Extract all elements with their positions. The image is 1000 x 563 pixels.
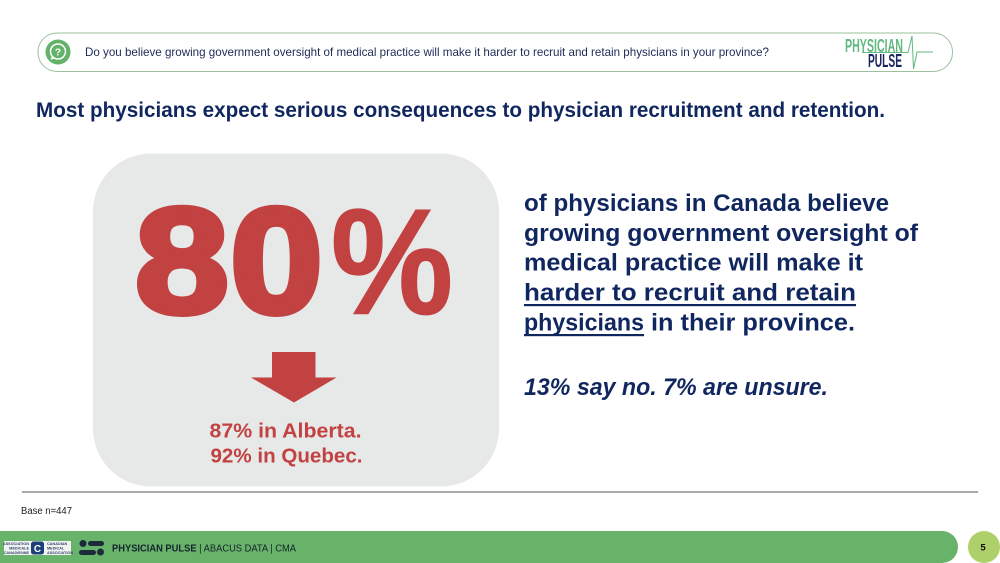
regional figures: 87% in Alberta. xyxy=(210,420,362,442)
arrow xyxy=(251,352,336,402)
logo: CMA: MÉDICALE xyxy=(9,546,29,550)
question banner xyxy=(38,33,952,72)
footer text: PHYSICIAN PULSE | ABACUS DATA | CMA xyxy=(112,544,296,554)
main statement: in their province. xyxy=(651,310,855,336)
main statement: medical practice will make it xyxy=(524,250,863,276)
logo: CMA: MEDICAL xyxy=(47,546,65,550)
panel: 80% statistic xyxy=(93,154,499,486)
secondary statement: 13% say no. 7% are unsure. xyxy=(524,374,828,401)
logo: Abacus Data xyxy=(79,540,104,556)
big number xyxy=(135,176,453,346)
question text: Do you believe growing government oversight of medical practice will make it harder to recruit and retain physicians in your province? xyxy=(85,45,769,59)
main statement: growing government oversight of xyxy=(524,220,919,247)
big number: 8 xyxy=(135,176,229,344)
logo: CMA xyxy=(3,541,73,555)
logo: Physician Pulse: PULSE xyxy=(868,51,902,71)
icon: question bubble xyxy=(46,40,70,64)
big number: 0 xyxy=(230,176,323,344)
main statement: harder to recruit and retain xyxy=(524,280,856,306)
logo: Physician Pulse: PHYSICIAN xyxy=(845,36,903,56)
page number xyxy=(968,531,1000,563)
icon: question bubble: ? xyxy=(55,46,61,58)
base note: Base n=447 xyxy=(21,506,72,517)
divider xyxy=(22,492,978,493)
big number: % xyxy=(331,178,453,346)
main statement: physicians xyxy=(524,310,644,336)
logo: Physician Pulse xyxy=(845,36,933,71)
footer bar xyxy=(0,531,958,563)
heading: Most physicians expect serious consequences to physician recruitment and retention. xyxy=(36,99,885,122)
logo: CMA: ASSOCIATION xyxy=(47,551,73,555)
logo: CMA: CANADIAN xyxy=(47,542,68,546)
page number: 5 xyxy=(980,542,986,554)
logo: CMA: C xyxy=(34,544,41,555)
regional figures: 92% in Quebec. xyxy=(210,446,362,468)
main statement xyxy=(524,190,919,336)
logo: CMA: CANADIENNE xyxy=(4,551,29,555)
regional figures xyxy=(210,420,362,468)
main statement: of physicians in Canada believe xyxy=(524,190,889,217)
logo: CMA: ASSOCIATION xyxy=(3,542,29,546)
